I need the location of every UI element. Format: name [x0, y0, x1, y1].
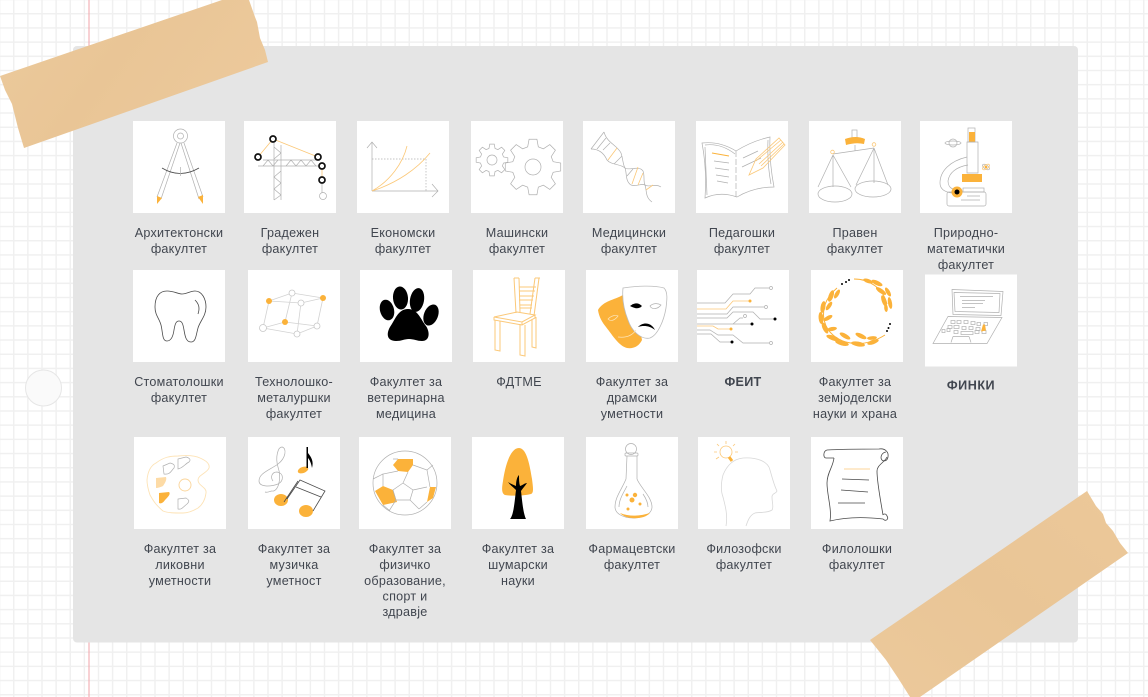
- label: факултет: [938, 258, 994, 272]
- punched hole: [26, 370, 62, 406]
- icon: tree: [502, 448, 533, 519]
- label: Градежен: [261, 226, 319, 240]
- card: Медицински факултет: [583, 121, 675, 256]
- notebook margin line: [88, 0, 90, 697]
- label: шумарски: [488, 558, 548, 572]
- card: ФДТМЕ: [473, 270, 565, 389]
- card: Факултет за земјоделски науки и храна: [811, 270, 903, 421]
- card: Природно-математички факултет: [920, 121, 1012, 272]
- icon: football: [373, 451, 437, 515]
- card: Машински факултет: [471, 121, 563, 256]
- label: Технолошко-: [255, 375, 333, 389]
- label: ФДТМЕ: [496, 375, 542, 389]
- label: Стоматолошки: [134, 375, 224, 389]
- label: факултет: [375, 242, 431, 256]
- label: ФИНКИ: [947, 378, 995, 392]
- label: ликовни: [155, 558, 205, 572]
- icon: chart: [367, 142, 438, 197]
- card: Факултет за шумарски науки: [472, 437, 564, 588]
- label: факултет: [262, 242, 318, 256]
- label: Педагошки: [709, 226, 775, 240]
- label: факултет: [151, 242, 207, 256]
- label: науки: [501, 574, 535, 588]
- icon: gears: [476, 139, 561, 195]
- icon: DNA: [591, 132, 661, 202]
- card: Економски факултет: [357, 121, 449, 256]
- label: металуршки: [257, 391, 331, 405]
- icon: music notes: [259, 447, 325, 517]
- label: Филозофски: [706, 542, 782, 556]
- label: Факултет за: [819, 375, 891, 389]
- label: науки и храна: [813, 407, 897, 421]
- label: драмски: [607, 391, 657, 405]
- card: Факултет за ветеринарна медицина: [360, 270, 452, 421]
- tape: bottom right: [870, 491, 1128, 697]
- label: факултет: [266, 407, 322, 421]
- label: Правен: [832, 226, 878, 240]
- label: музичка: [269, 558, 319, 572]
- icon: crane: [255, 136, 326, 200]
- icon: tooth: [155, 291, 206, 342]
- tape: top left: [0, 0, 268, 148]
- icon: microscope: [940, 128, 990, 206]
- label: физичко: [379, 558, 431, 572]
- label: Машински: [486, 226, 548, 240]
- card: Педагошки факултет: [696, 121, 788, 256]
- label: уметности: [601, 407, 663, 421]
- icon: circuit traces: [697, 286, 776, 344]
- card: Факултет за драмски уметности: [586, 270, 678, 421]
- icon: palette: [147, 456, 209, 513]
- icon: compass: [157, 129, 203, 204]
- label: здравје: [382, 605, 428, 619]
- label: Филолошки: [822, 542, 892, 556]
- icon: scales: [818, 130, 891, 202]
- label: Факултет за: [482, 542, 554, 556]
- card: Факултет за ликовни уметности: [134, 437, 226, 588]
- label: Факултет за: [370, 375, 442, 389]
- label: факултет: [601, 242, 657, 256]
- label: факултет: [829, 558, 885, 572]
- card: Факултет за физичко образование, спорт и здравје: [359, 437, 451, 619]
- card: Филолошки факултет: [811, 437, 903, 572]
- label: Факултет за: [369, 542, 441, 556]
- label: математички: [927, 242, 1005, 256]
- card: Технолошко-металуршки факултет: [248, 270, 340, 421]
- label: Факултет за: [596, 375, 668, 389]
- label: факултет: [489, 242, 545, 256]
- label: Економски: [371, 226, 435, 240]
- icon: scroll: [824, 449, 888, 521]
- label: уметности: [149, 574, 211, 588]
- card: Филозофски факултет: [698, 437, 790, 572]
- icon: flask: [615, 444, 652, 518]
- icon: theatre masks: [598, 286, 667, 348]
- label: Природно-: [934, 226, 998, 240]
- label: ветеринарна: [367, 391, 445, 405]
- label: медицина: [376, 407, 436, 421]
- label: Медицински: [592, 226, 666, 240]
- label: Архитектонски: [135, 226, 223, 240]
- icon: laptop: [933, 290, 1003, 344]
- grey panel: [73, 46, 1078, 642]
- label: факултет: [714, 242, 770, 256]
- label: земјоделски: [818, 391, 892, 405]
- card: Стоматолошки факултет: [133, 270, 225, 405]
- label: Фармацевтски: [588, 542, 676, 556]
- label: Факултет за: [258, 542, 330, 556]
- label: уметност: [266, 574, 322, 588]
- label: факултет: [827, 242, 883, 256]
- card: Градежен факултет: [244, 121, 336, 256]
- label: ФЕИТ: [725, 375, 761, 389]
- label: факултет: [716, 558, 772, 572]
- card: Правен факултет: [809, 121, 901, 256]
- label: факултет: [604, 558, 660, 572]
- label: образование,: [364, 574, 446, 588]
- icon: chair: [494, 278, 540, 356]
- icon: head with light bulb: [714, 441, 777, 526]
- icon: crystal lattice: [260, 290, 326, 337]
- label: факултет: [151, 391, 207, 405]
- card: Факултет за музичка уметност: [248, 437, 340, 588]
- icon: paw: [378, 286, 442, 341]
- card: Фармацевтски факултет: [586, 437, 678, 572]
- icon: book and pencil: [702, 137, 785, 198]
- label: Факултет за: [144, 542, 216, 556]
- card: ФИНКИ: [925, 274, 1017, 392]
- card: Архитектонски факултет: [133, 121, 225, 256]
- icon: laurel wreath: [818, 277, 893, 348]
- label: спорт и: [383, 590, 427, 604]
- card: ФЕИТ: [697, 270, 789, 389]
